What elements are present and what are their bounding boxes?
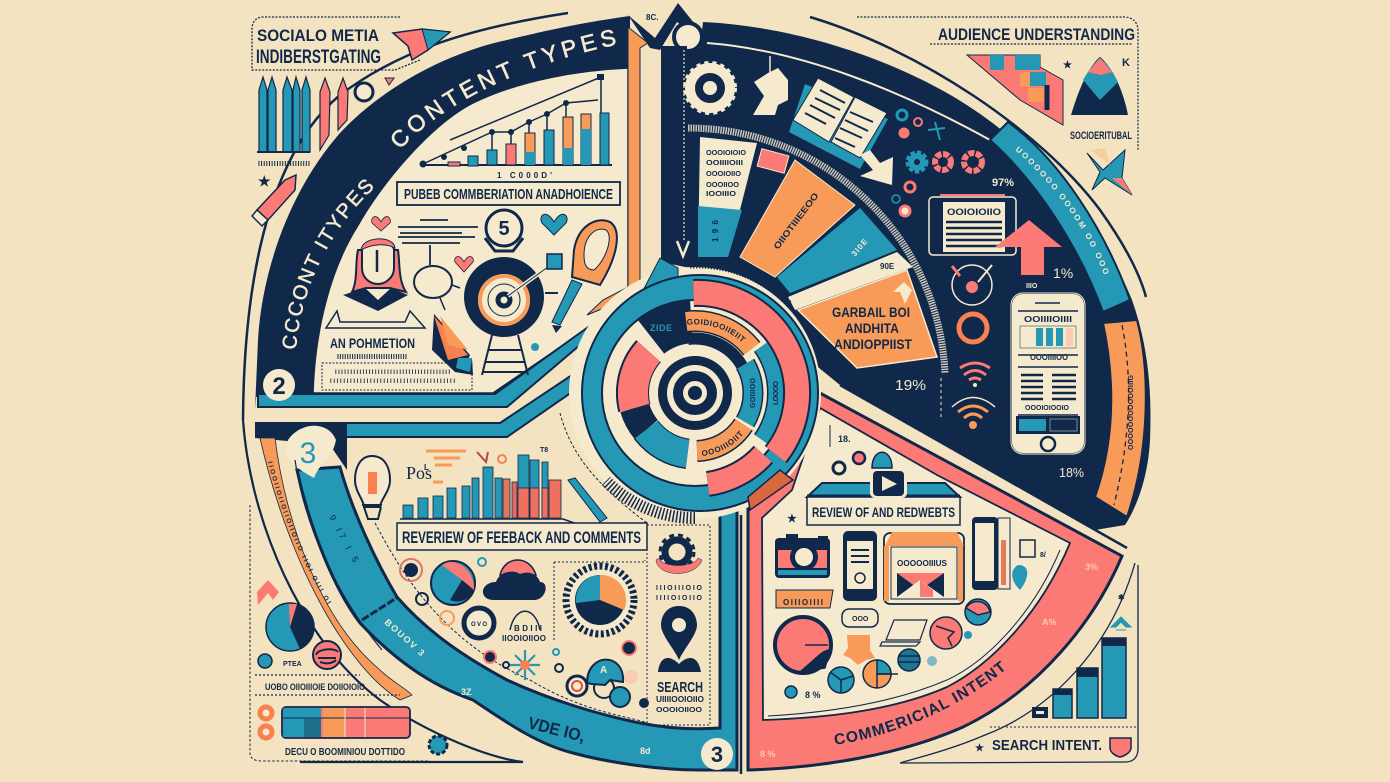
panel: navy audience understanding (top right) <box>628 3 1150 530</box>
hatched tag <box>748 470 793 510</box>
band labels: VDE IO, <box>526 713 587 746</box>
dashed box: search: UIIIIOOIOIIO <box>656 695 704 704</box>
stacked bar <box>282 707 410 738</box>
wedge: orange main: GARBAIL BOI <box>832 304 910 320</box>
icon: origami <box>432 314 473 375</box>
navy header <box>255 422 347 470</box>
orange band <box>1095 320 1146 517</box>
coral labels: 3% <box>1085 562 1098 572</box>
teal connector <box>626 258 678 323</box>
band labels: BOUOV 3 <box>383 617 427 658</box>
dashed box: search <box>647 525 710 725</box>
centre rings <box>649 347 741 439</box>
icon: gauge <box>775 617 831 673</box>
wedge: orange main: ANDHITA <box>845 320 899 336</box>
icon: dial <box>952 265 992 305</box>
icon: teal helmet <box>587 660 623 685</box>
icon: shield <box>1110 738 1131 757</box>
title box <box>397 182 620 205</box>
number badge 2: 2 <box>272 373 286 400</box>
percent labels: 1% <box>1053 265 1073 281</box>
icon: phone: OOOIOIOOIO <box>1025 405 1070 412</box>
panel: commercial intent (bottom right): 8 % <box>805 690 821 700</box>
hub: central target: OOOIIIOIIT <box>702 430 742 456</box>
text: an pohmetion <box>322 335 472 390</box>
icon: gear search <box>656 535 702 574</box>
top icons <box>830 425 892 474</box>
text: an pohmetion: IIIIIIIIIIIIIIIIIIIIIIIIIIIIIIIIIIIIII <box>335 370 450 376</box>
wedge: orange main: ANDIOPPIIST <box>834 336 912 352</box>
teal band <box>297 467 737 770</box>
wedge: orange <box>740 160 855 277</box>
icon: arrow <box>860 150 893 185</box>
icon: circles <box>260 707 272 738</box>
icon: orange pin <box>552 220 617 333</box>
icon: teal gear <box>429 736 447 754</box>
title box: review of feedback: REVERIEW OF FEEBACK AND COMMENTS <box>402 528 641 547</box>
percent labels: 97% <box>992 177 1014 189</box>
teal ring <box>582 275 818 511</box>
icon: play <box>870 469 907 498</box>
icon: coral arrow <box>257 580 279 605</box>
label: post: L <box>424 463 429 472</box>
small icons <box>1111 593 1131 630</box>
wedge: cream list: IOOIIIO <box>706 191 737 198</box>
text: distribution: UOBO OIIOIIIOIE DOIIOIOIO <box>265 682 365 692</box>
icon: camera <box>775 534 830 578</box>
icon: up arrow <box>995 220 1062 275</box>
icon: phone <box>1011 293 1085 454</box>
text: bottom: DECU O BOOMINIOU DOTTIDO <box>285 747 405 758</box>
top mark label: 8C. <box>646 13 658 22</box>
navy divider <box>635 408 646 430</box>
title: search intent <box>975 727 1137 754</box>
coral labels: 8 % <box>760 749 776 759</box>
label: orange tag <box>776 590 833 608</box>
navy arc <box>688 339 742 366</box>
orange label arc <box>686 321 752 349</box>
orange band <box>260 438 413 700</box>
dashed arcs <box>375 400 705 722</box>
title: search intent: ★ <box>975 743 984 754</box>
text: search: SEARCH <box>657 679 703 696</box>
wedge: orange: OIIOTIIIEEOO <box>772 191 821 251</box>
icon: tablet: OOIOIOIIO <box>947 207 1001 217</box>
icon: ring: OVO <box>471 622 487 628</box>
dashed box: search: IIIOIIIOIO <box>656 585 703 592</box>
orange lower label <box>697 425 744 451</box>
icon: small globe <box>258 654 302 668</box>
icon: phone: OOOIIIIOO <box>1030 353 1068 362</box>
navy curved band <box>255 16 630 410</box>
icon: head <box>753 56 788 115</box>
orange band: OOOOOOOOOOOIIIG <box>1128 374 1135 450</box>
badge 3 top: 3 <box>300 437 316 470</box>
coral shape <box>748 392 1122 770</box>
bar chart: feedback <box>403 455 561 518</box>
icon: tablet <box>929 195 1016 255</box>
icon: paper plane <box>393 29 450 60</box>
coral sector <box>633 352 649 408</box>
icon: pie left <box>266 603 314 651</box>
heading: commercial intent: COMMERICIAL INTENT <box>834 660 1004 744</box>
hatched arc <box>687 128 945 373</box>
icon: mountain <box>1071 57 1128 115</box>
icon: burst <box>510 650 540 680</box>
teal strip <box>258 320 600 407</box>
hub: central target: LOOOO <box>773 380 780 405</box>
thin curve and dashed box <box>900 563 1138 763</box>
orange band: IIOOIIOIIOIIOIIOIIO IIOI OIII OI <box>268 461 332 604</box>
teal band <box>988 121 1129 311</box>
panel: social media corner <box>252 17 450 226</box>
stars: K <box>1122 57 1130 69</box>
lower teal diagonal <box>333 373 575 437</box>
icon: lightbulb <box>355 456 390 519</box>
stars: ★ <box>1063 60 1072 71</box>
wedge: cream list <box>698 137 757 257</box>
percent labels: IIIO <box>1026 283 1038 290</box>
coral arcs <box>694 293 797 455</box>
band labels <box>327 513 651 756</box>
coral labels <box>760 562 1098 759</box>
icon: gear blob <box>355 78 394 101</box>
icon: tablet small <box>972 517 1046 590</box>
icon: pencil <box>252 173 296 226</box>
text: an pohmetion: AN POHMETION <box>330 335 415 351</box>
icon: marker <box>568 478 607 522</box>
percent labels <box>895 177 1084 480</box>
hub: central target <box>569 257 821 524</box>
icon: ring <box>464 608 494 638</box>
teal arcs right <box>745 364 753 422</box>
pencils: IIIIIIIIIIIIIIIIIIII <box>258 161 310 168</box>
teal sector <box>646 430 688 454</box>
icon: laptop <box>880 620 927 646</box>
heading: ccont itypes: CCCONT ITYPES <box>282 180 373 349</box>
coral labels: A% <box>1042 617 1057 627</box>
badge 5: 5 <box>498 218 510 240</box>
band labels: 3Z <box>461 687 472 697</box>
band labels: 8d <box>640 746 651 756</box>
wedge: cream list: OOIIIIOIII <box>706 160 743 167</box>
icon: woman <box>326 239 425 328</box>
icon: arc label <box>502 611 546 643</box>
icon: book <box>789 78 888 169</box>
icon: speech <box>842 609 878 665</box>
hub: central target: GOIDIOOIIEIIT <box>687 318 746 342</box>
title: understanding: INDIBERSTGATING <box>256 47 381 68</box>
flow bubble <box>414 266 460 310</box>
pencils <box>257 77 348 168</box>
label: post <box>406 447 548 483</box>
percent labels: 18% <box>1059 465 1084 480</box>
icon: location pin <box>658 606 701 672</box>
icon: cloud <box>483 560 546 600</box>
title box: review of feedback <box>397 523 647 550</box>
dashed box: search: OOOIOIIOO <box>656 707 703 714</box>
band labels: 9 I7 I 5 <box>327 513 360 564</box>
bar chart <box>420 74 612 180</box>
panel: video (bottom left) <box>242 412 742 774</box>
icon: tablet small: 8/ <box>1040 552 1046 559</box>
title box: PUBEB COMMBERIATION ANADHOIENCE <box>404 186 613 203</box>
label: orange tag: OIIIOIIII <box>783 598 823 607</box>
hub: central target: ZIDE <box>650 323 672 333</box>
icon: wifi 2 <box>952 398 995 429</box>
badge 3 bottom <box>701 738 733 770</box>
panel: content types (top left) <box>242 12 648 438</box>
icon: target dial <box>464 254 562 375</box>
top icons: 18. <box>838 434 851 444</box>
icon: gear pie <box>554 560 645 640</box>
icon: arc label: BDIII <box>514 624 542 633</box>
icon: envelope card: OOOOOIIIUS <box>897 558 947 568</box>
text: an pohmetion: IIIIIIIIIIIIIIIIIIIIIIIIIIIIIIIIIIIIII <box>330 379 455 385</box>
bar chart: search intent <box>1032 638 1126 718</box>
label: post: Pos <box>406 463 432 483</box>
icon: orange gear <box>959 314 987 342</box>
title: social media: SOCIALO METIA <box>257 26 379 45</box>
label: post: T8 <box>540 447 548 454</box>
wedge: cream list: OOOIOIOIO <box>706 150 747 157</box>
charts small <box>785 599 991 698</box>
stacked blocks <box>967 55 1063 125</box>
label: socioeritubal: SOCIOERITUBAL <box>1070 130 1132 142</box>
title: audience understanding: AUDIENCE UNDERSTANDING <box>938 25 1135 44</box>
panel: audience understanding corner <box>857 17 1138 195</box>
icon: small globe: PTEA <box>283 661 302 668</box>
stars <box>1063 57 1130 71</box>
badge 3 top <box>286 426 336 478</box>
badge 5 <box>485 210 523 251</box>
small icons: ✱ <box>1118 593 1125 602</box>
top arrow mark <box>628 3 702 256</box>
navy quadrant <box>661 22 1150 530</box>
teal band: UOOOOOO OOOOM OO OOO <box>1016 146 1108 274</box>
navy wedge <box>651 321 691 336</box>
icon: gear <box>685 63 735 113</box>
wedge: cream list: OOOIIOO <box>706 182 740 189</box>
orange strip <box>587 27 648 315</box>
icon: phone small <box>843 531 877 601</box>
icon: speech: OOO <box>852 616 869 623</box>
title: search intent: SEARCH INTENT. <box>992 737 1102 754</box>
dashed left box <box>250 505 430 761</box>
icon: swirl <box>567 676 587 696</box>
wedge: teal: 3I0E <box>850 237 870 258</box>
badge 3 bottom: 3 <box>711 742 723 767</box>
panel: commercial intent (bottom right) <box>746 385 1139 772</box>
icon: small gears <box>892 110 982 216</box>
icon: phone: OOIIIIOIIII <box>1024 315 1072 324</box>
text: an pohmetion: IIIIIIIIIIIIIIIIIIIIIIIIIIIII <box>337 354 407 361</box>
video box <box>807 469 960 525</box>
text lines <box>398 220 478 265</box>
wedge: cream list: 1 9 6 <box>711 219 720 242</box>
icon: pencil: ★ <box>258 173 271 189</box>
panel: commercial intent (bottom right): ★ <box>787 513 797 525</box>
video box: REVIEW OF AND REDWEBTS <box>812 504 955 520</box>
dashed box: search: IIIIOIOIIO <box>656 595 703 602</box>
label: coral tag <box>757 149 789 173</box>
wedge: cream <box>788 252 913 310</box>
icon: plane <box>1087 148 1132 195</box>
wedge: cream: 90E <box>880 262 895 271</box>
number badge 2 <box>263 369 295 401</box>
bar chart: 1 C000D' <box>497 171 552 180</box>
icon: teal helmet: A <box>600 665 607 676</box>
cream panel <box>762 408 1070 720</box>
icon: arc label: IIOOIOIIOO <box>502 634 546 643</box>
heading: content types: CONTENT TYPES <box>392 30 616 146</box>
wedge: teal <box>777 208 897 293</box>
icon: envelope card <box>884 532 964 604</box>
small dots <box>400 558 648 707</box>
hub: central target: GOIIIOO <box>750 377 757 408</box>
wedge: cream list: OOOIOIIO <box>706 171 742 178</box>
percent labels: 19% <box>895 377 926 394</box>
icon: hearts <box>372 214 567 272</box>
icon: swirl left <box>313 641 341 669</box>
icon: pie coral <box>431 561 475 605</box>
icon: wifi 1 <box>960 363 990 387</box>
wedge: orange main <box>798 270 937 368</box>
